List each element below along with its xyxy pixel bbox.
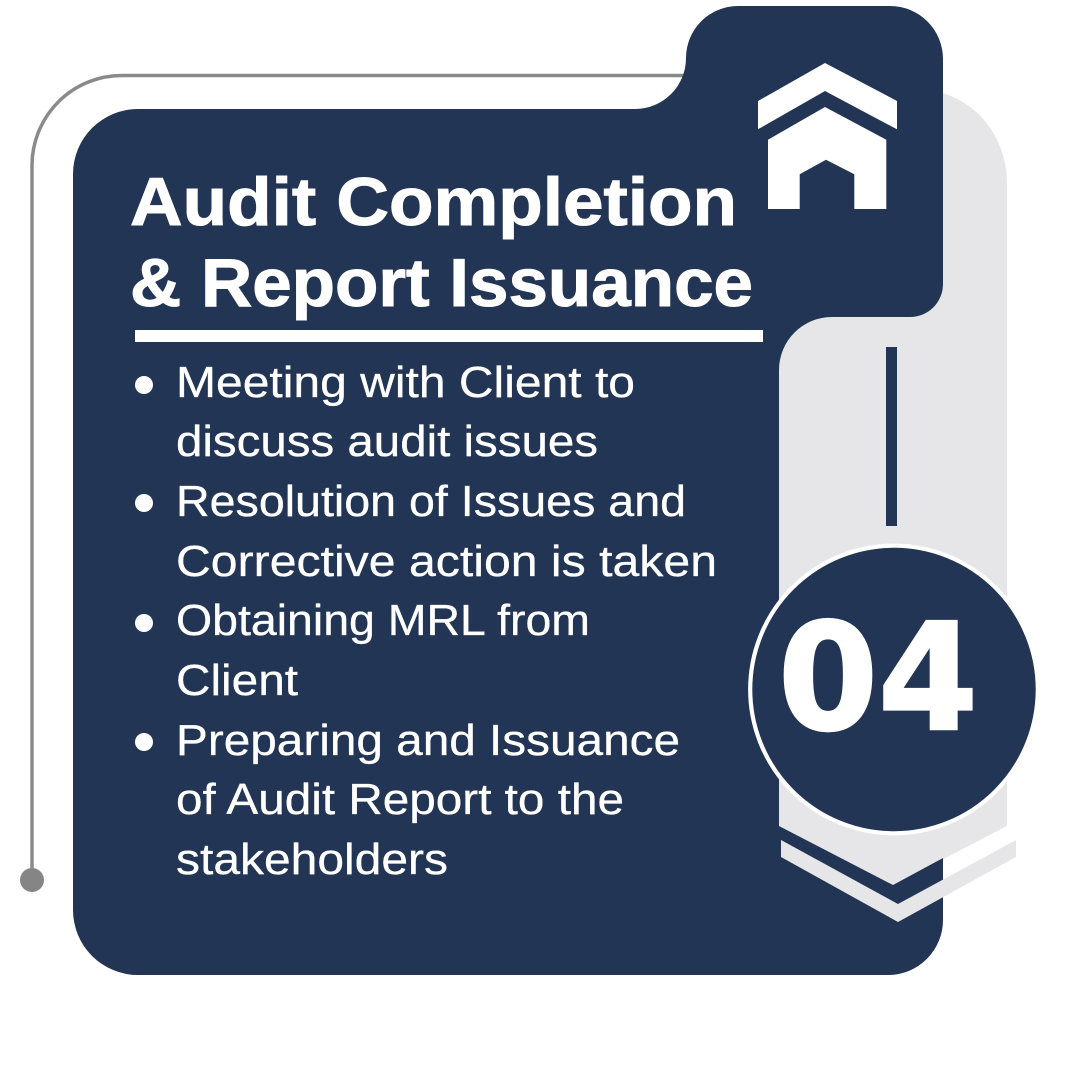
panel: navy main card — [73, 6, 943, 975]
bullet 3 — [135, 596, 590, 705]
vertical bar — [886, 347, 897, 526]
bullet 1 — [135, 358, 635, 466]
bullet 3: Obtaining MRL from — [176, 596, 590, 645]
bullet 4: stakeholders — [176, 835, 448, 884]
bullet list — [135, 358, 717, 884]
panel: grey side panel — [779, 90, 1007, 885]
bullet 1: discuss audit issues — [176, 417, 598, 466]
title underline — [135, 330, 763, 342]
connector line with end dot — [20, 76, 690, 892]
title — [130, 164, 753, 321]
bullet 4 — [135, 716, 680, 884]
lower chevron — [781, 840, 1016, 922]
bullet 2 — [135, 477, 717, 586]
bullet 3: Client — [176, 656, 298, 705]
step number badge — [750, 546, 1038, 833]
bullet 4: Preparing and Issuance — [176, 716, 680, 765]
bullet 2: Corrective action is taken — [176, 537, 717, 586]
bullet 2: Resolution of Issues and — [176, 477, 686, 526]
bullet 4: of Audit Report to the — [176, 775, 624, 824]
icon: house with roof chevron — [758, 63, 897, 209]
title: & Report Issuance — [130, 245, 753, 321]
title: Audit Completion — [130, 164, 737, 240]
step number badge: 04 — [778, 592, 978, 764]
bullet 1: Meeting with Client to — [176, 358, 635, 407]
